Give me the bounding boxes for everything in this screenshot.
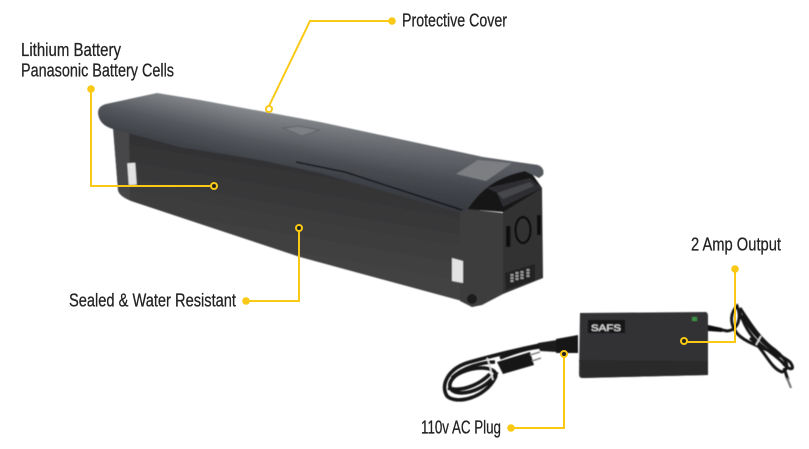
cover button <box>283 126 319 136</box>
line: lithium battery <box>91 89 211 186</box>
cover seam <box>296 162 462 210</box>
ring: lithium <box>211 183 217 189</box>
plug boot <box>556 335 578 353</box>
ring: 2 amp <box>681 338 687 344</box>
battery body <box>113 125 480 307</box>
line: protective cover <box>269 21 392 106</box>
label: sealed: Sealed & Water Resistant <box>69 290 236 310</box>
warning sticker <box>456 160 512 181</box>
battery end cap <box>460 208 503 307</box>
output cable tie <box>756 336 761 345</box>
charger box <box>579 312 708 378</box>
line: AC plug <box>511 357 564 428</box>
plug prongs <box>530 352 541 361</box>
output cable tip <box>787 378 791 388</box>
callout lines <box>91 21 735 428</box>
dot: sealed <box>242 297 250 305</box>
ring: protective cover <box>266 106 272 112</box>
label: AC plug: 110v AC Plug <box>421 418 501 438</box>
strain relief <box>538 340 557 352</box>
logo plate <box>588 320 625 333</box>
label: panasonic cells: Panasonic Battery Cells <box>21 60 174 80</box>
label: 2 amp output: 2 Amp Output <box>691 234 781 254</box>
left slot <box>506 226 510 247</box>
body left end shading <box>113 128 130 200</box>
output strain relief <box>708 325 722 332</box>
body white label left <box>127 163 137 185</box>
output cable <box>708 306 792 380</box>
ring: sealed <box>296 225 302 231</box>
line: sealed <box>246 231 299 301</box>
vent marks <box>512 269 528 282</box>
LED <box>692 317 697 321</box>
latch highlight <box>497 182 534 199</box>
dot: protective cover <box>388 17 396 25</box>
dot: lithium <box>87 85 95 93</box>
label: protective cover: Protective Cover <box>402 10 507 30</box>
right slot <box>537 215 541 235</box>
AC plug <box>497 352 534 374</box>
charger lower band <box>579 360 708 378</box>
vents <box>505 264 535 290</box>
callout rings <box>211 106 687 357</box>
dot: 2 amp <box>731 265 739 273</box>
charger <box>445 306 792 400</box>
latch <box>487 178 542 207</box>
label: lithium battery: Lithium Battery <box>21 40 121 60</box>
line: 2 amp <box>687 269 735 342</box>
dot: AC plug <box>507 424 515 432</box>
battery <box>98 93 543 307</box>
logo: SAFS <box>591 323 621 333</box>
battery end face <box>503 188 543 294</box>
foot <box>467 294 477 304</box>
handle recess <box>466 168 542 212</box>
AC cable coil <box>445 345 540 400</box>
body white label right <box>452 258 463 283</box>
charge port <box>516 217 530 243</box>
protective cover <box>98 93 543 212</box>
cover right shading <box>250 108 543 212</box>
ring: AC plug <box>561 351 567 357</box>
callout dots <box>87 17 739 432</box>
cable tie <box>487 358 493 380</box>
